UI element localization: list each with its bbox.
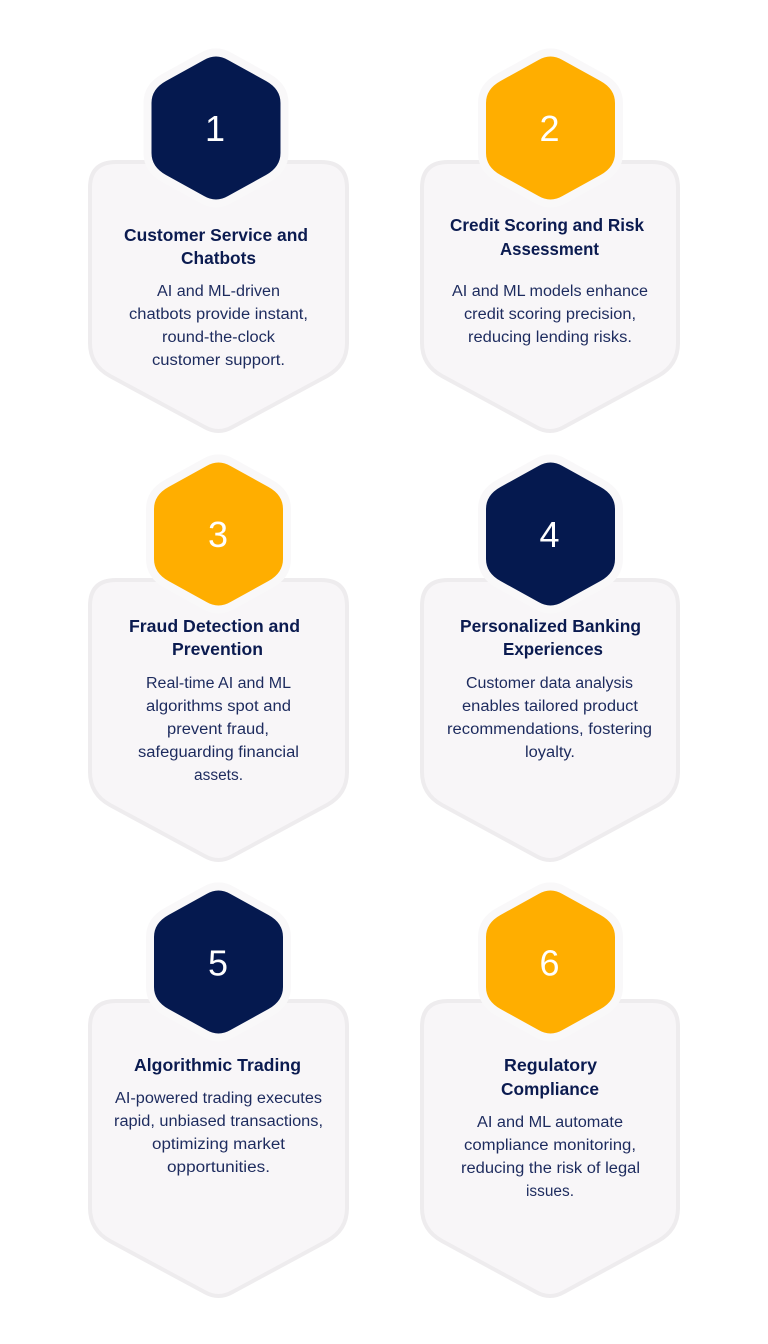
description 3 [138, 675, 299, 784]
description 3: algorithms spot and [146, 698, 291, 715]
hexagon halo 6 [486, 890, 615, 1034]
panel: algorithmic trading [90, 890, 347, 1296]
panel: fraud detection and prevention [90, 462, 347, 860]
description 1: chatbots provide instant, [129, 306, 308, 323]
hexagon halo 5 [154, 890, 283, 1034]
description 5: optimizing market [152, 1136, 286, 1153]
heading 1: Customer Service and [124, 225, 308, 245]
card shape 5 [90, 1001, 347, 1296]
hexagon halo 3 [154, 462, 283, 606]
hexagon halo 1 [152, 56, 280, 200]
heading 4: Experiences [503, 639, 603, 659]
description 2: credit scoring precision, [464, 306, 636, 323]
description 1 [129, 283, 308, 369]
description 6 [461, 1114, 640, 1200]
number badge 3 [154, 462, 283, 606]
description 5 [114, 1090, 323, 1176]
number badge 6: 6 [539, 942, 560, 984]
heading 6 [501, 1055, 599, 1099]
panel: customer service and chatbots [90, 56, 347, 431]
heading 2: Assessment [500, 239, 599, 259]
description 1: round-the-clock [162, 329, 275, 346]
number badge 3: 3 [208, 514, 228, 555]
description 2 [452, 283, 648, 346]
description 6: AI and ML automate [477, 1114, 623, 1131]
heading 1 [124, 225, 308, 268]
heading 3: Fraud Detection and [129, 616, 300, 636]
heading 3 [129, 616, 300, 659]
number badge 5 [154, 890, 283, 1034]
heading 6: Regulatory [504, 1055, 597, 1075]
description 4: enables tailored product [462, 698, 639, 715]
description 3: safeguarding financial [138, 744, 299, 761]
card shape 1 [90, 162, 347, 431]
card shape 3 [90, 580, 347, 860]
number badge 2 [486, 56, 615, 200]
description 5: rapid, unbiased transactions, [114, 1113, 323, 1130]
description 2: AI and ML models enhance [452, 283, 648, 300]
description 1: customer support. [152, 352, 285, 369]
hexagon halo 4 [486, 462, 615, 606]
heading 2 [450, 215, 644, 259]
number badge 6 [486, 890, 615, 1034]
description 6: issues. [526, 1183, 574, 1200]
number badge 4: 4 [539, 514, 560, 555]
description 5: opportunities. [167, 1159, 270, 1176]
heading 3: Prevention [172, 639, 263, 659]
number badge 4 [486, 462, 615, 606]
description 3: Real-time AI and ML [146, 675, 291, 692]
card shape 2 [422, 162, 678, 431]
heading 1: Chatbots [181, 248, 256, 268]
description 1: AI and ML-driven [157, 283, 280, 300]
hexagon halo 2 [486, 56, 615, 200]
description 3: prevent fraud, [167, 721, 269, 738]
description 3: assets. [194, 767, 243, 784]
heading 4 [460, 616, 641, 659]
description 4 [447, 675, 652, 761]
number badge 1 [152, 56, 280, 200]
number badge 2: 2 [539, 108, 560, 149]
heading 5: Algorithmic Trading [134, 1055, 301, 1075]
heading 4: Personalized Banking [460, 616, 641, 636]
panel: regulatory compliance [422, 890, 678, 1296]
card shape 4 [422, 580, 678, 860]
card shape 6 [422, 1001, 678, 1296]
description 5: AI-powered trading executes [115, 1090, 322, 1107]
panel: personalized banking experiences [422, 462, 678, 860]
panel: credit scoring and risk assessment [422, 56, 678, 431]
description 4: Customer data analysis [466, 675, 633, 692]
heading 2: Credit Scoring and Risk [450, 215, 644, 235]
number badge 1: 1 [205, 108, 225, 149]
description 6: reducing the risk of legal [461, 1160, 640, 1177]
heading 6: Compliance [501, 1079, 599, 1099]
description 4: loyalty. [525, 744, 575, 761]
description 4: recommendations, fostering [447, 721, 652, 738]
number badge 5: 5 [208, 942, 228, 984]
description 2: reducing lending risks. [468, 329, 632, 346]
description 6: compliance monitoring, [464, 1137, 636, 1154]
